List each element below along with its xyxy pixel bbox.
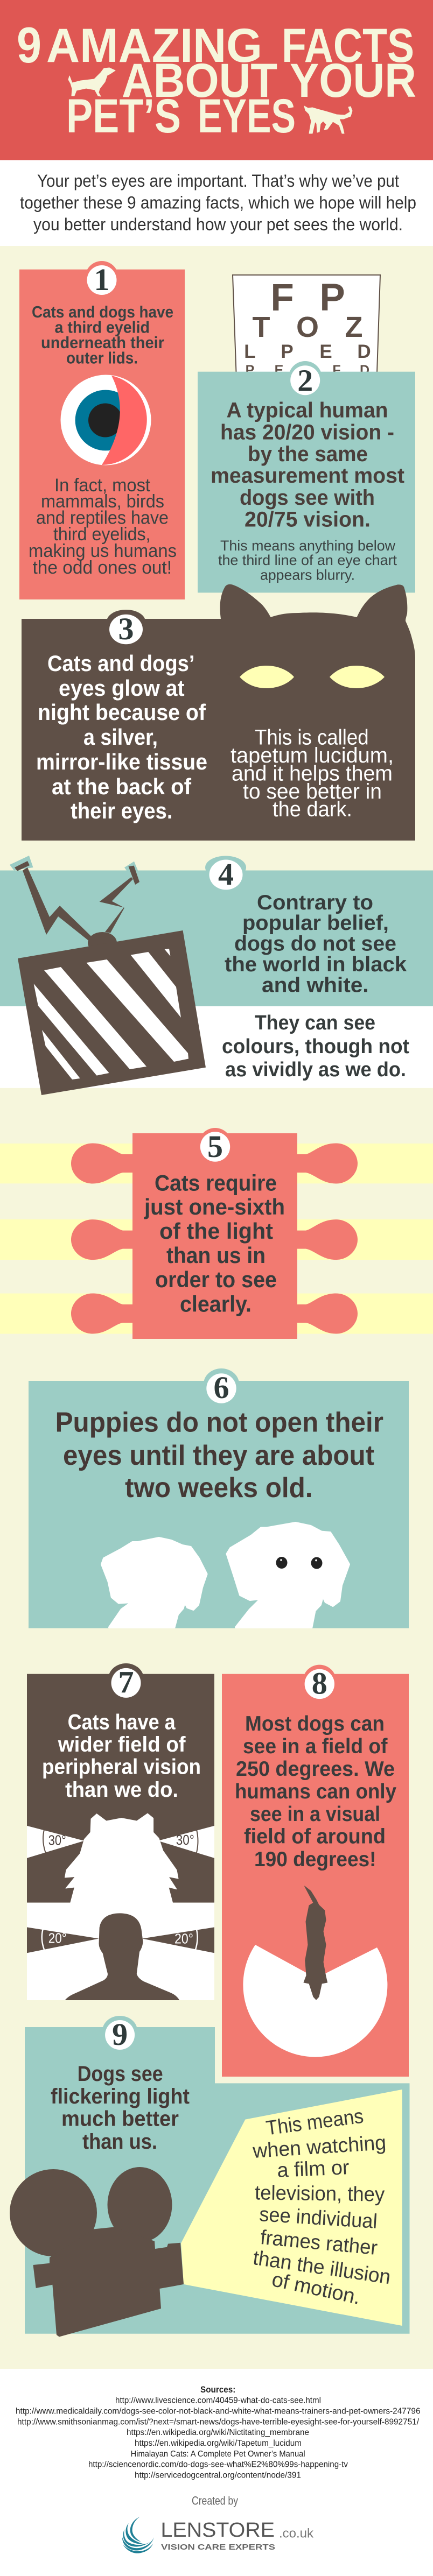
fact 9 body text on beam: than the illusion [252,2247,392,2289]
logo: Lenstore: VISION CARE EXPERTS [161,2543,275,2552]
icon: eye chart: L [244,341,256,362]
fact 9 heading: than us. [82,2130,157,2154]
fact 8 text [235,1712,396,1871]
fact 1 body text: mammals, birds [41,491,164,512]
fact 4 heading: popular belief, [242,912,389,935]
fact 2 heading: has 20/20 vision - [220,420,394,444]
fact 2 body text [218,538,397,583]
human vision diagram: 20° [48,1930,67,1946]
number 5 [200,1129,230,1164]
cat vision diagram: 30° [48,1832,66,1848]
fact 4 body text: They can see [255,1012,375,1034]
fact 3 body text: the dark. [273,797,352,821]
sources list: https://en.wikipedia.org/wiki/Tapetum_lucidum [135,2439,302,2448]
fact 1 body text [29,475,177,578]
panel: fact 6 [29,1368,409,1628]
fact 2 heading: by the same [248,442,368,466]
number 7 [111,1665,141,1700]
fact 9 body text on beam: a film or [277,2156,350,2182]
fact 4 body text: as vividly as we do. [225,1058,406,1081]
fact 8 text: see in a visual [250,1803,380,1826]
fact 9 heading [51,2062,190,2154]
header: title [0,0,433,160]
fact 2 heading: measurement most [211,464,404,488]
fact 3 heading: eyes glow at [59,675,185,701]
intro text: Your pet’s eyes are important. That’s why we’ve put [37,171,399,190]
fact 5 text: of the light [159,1218,273,1244]
fact 8 text: 250 degrees. We [236,1758,395,1781]
number 6: 6 [213,1370,229,1405]
fact 8 text: field of around [244,1825,386,1848]
intro text [20,171,416,234]
panel: fact 9 [10,2016,409,2337]
fact 5 text: order to see [155,1267,277,1292]
fact 6 text: Puppies do not open their [55,1407,383,1438]
fact 9 body text on beam: frames rather [260,2226,379,2260]
number 9: 9 [112,2017,128,2052]
sources list: Sources: [200,2384,235,2395]
fact 3 heading: night because of [38,700,206,725]
fact 3 body text: This is called [255,726,369,750]
fact 1 body text: In fact, most [54,475,151,496]
icon: eye with third eyelid [60,375,151,465]
fact 2 body text: appears blurry. [260,567,355,583]
sources list: http://sciencenordic.com/do-dogs-see-what%E2%80%99s-happening-tv [88,2460,348,2469]
fact 7 text [42,1711,201,1802]
fact 9 body text on beam: of motion. [270,2268,362,2309]
number 3: 3 [118,611,134,646]
number 6 [206,1370,236,1405]
fact 9 body text on beam [252,2105,392,2309]
panel: fact 8 [222,1665,409,2077]
fact 9 heading: Dogs see [78,2062,163,2086]
sources list: http://www.livescience.com/40459-what-do-cats-see.html [115,2396,321,2405]
fact 1 heading: underneath their [41,333,164,352]
fact 5 text: clearly. [180,1291,252,1316]
fact 8 text: humans can only [235,1780,396,1803]
icon: film camera [10,2167,184,2337]
fact 3 body text: to see better in [243,780,382,803]
fact 9 heading: much better [61,2107,179,2131]
fact 3 heading: mirror-like tissue [36,749,207,774]
title text: PET’S [66,89,181,143]
fact 7 text: than we do. [65,1778,178,1802]
fact 3 body text: and it helps them [232,762,393,786]
icon: eye chart: D [357,341,371,362]
icon: eye chart: E [319,341,332,362]
number 2: 2 [297,363,313,398]
fact 5 text: Cats require [155,1170,277,1196]
fact 4 body text [222,1012,409,1081]
panel: fact 4 [0,856,433,1095]
icon: puppy with open eyes [227,1523,349,1627]
title text [17,17,416,143]
number 9 [105,2017,135,2052]
fact 9 body text on beam: see individual [259,2203,378,2233]
fact 4 heading: dogs do not see [234,932,396,955]
number 1: 1 [94,262,110,297]
fact 7 text: peripheral vision [42,1755,201,1779]
fact 6 text: eyes until they are about [63,1440,374,1471]
number 5: 5 [207,1129,223,1164]
icon: eye chart: E [275,363,283,378]
fact 7 text: Cats have a [68,1711,176,1734]
icon: cat [304,106,352,133]
panel: fact 5 [0,1128,433,1339]
fact 3 heading: at the back of [52,774,192,799]
fact 4 heading [225,891,407,997]
icon: eye chart: P [246,363,254,378]
fact 4 body text: colours, though not [222,1035,409,1058]
human vision diagram: 20° [174,1930,193,1946]
fact 9 heading: flickering light [51,2085,190,2108]
fact 5 text: just one-sixth [144,1194,285,1219]
fact 5 text: than us in [166,1243,266,1268]
fact 2 heading [211,399,404,532]
sources list: http://servicedogcentral.org/content/node/391 [135,2471,301,2480]
fact 2 heading: 20/75 vision. [245,508,371,532]
icon: eye chart: P [319,277,345,319]
fact 6 text: two weeks old. [125,1472,312,1504]
fact 1 body text: and reptiles have [36,508,169,528]
fact 1 heading: Cats and dogs have [32,302,173,321]
title text: ABOUT [122,53,277,107]
number 8 [305,1666,334,1700]
icon: eye chart: F [332,363,341,378]
fact 4 heading: the world in black [225,953,407,976]
sources list: http://www.medicaldaily.com/dogs-see-color-not-black-and-white-what-means-trainers-and-pet-owners-247796 [16,2406,421,2416]
dog field of vision diagram [243,1886,387,2057]
title text: YOUR [290,53,416,107]
fact 2 heading: dogs see with [240,486,375,510]
fact 1 heading: outer lids. [66,349,138,368]
fact 3 heading: a silver, [83,724,158,750]
fact 2 body text: the third line of an eye chart [218,552,397,568]
title text: AMAZING [46,18,262,72]
fact 6 text [55,1407,383,1504]
logo: Lenstore: .co.uk [279,2526,314,2541]
sources list: http://www.smithsonianmag.com/ist/?next=/smart-news/dogs-have-terrible-eyesight-see-for-yourself-8992751/ [17,2417,420,2427]
icon: eye chart: O [296,311,319,343]
number 1 [87,262,116,297]
fact 2 body text: This means anything below [220,538,395,554]
number 8: 8 [312,1666,327,1700]
intro text: you better understand how your pet sees the world. [33,215,403,234]
sources list: https://en.wikipedia.org/wiki/Nictitating_membrane [127,2428,309,2437]
fact 2 heading: A typical human [226,399,388,422]
fact 1 body text: third eyelids, [53,524,151,545]
icon: eye chart: F [270,277,294,319]
fact 8 text: see in a field of [243,1735,388,1758]
fact 8 text: 190 degrees! [254,1848,376,1871]
panel: fact 3 [22,584,415,841]
icon: eye chart: Z [345,311,363,343]
number 4: 4 [218,857,234,892]
fact 4 heading: Contrary to [257,891,373,914]
light bulbs [71,1143,358,1333]
created by: Created by [192,2494,238,2508]
icon: television with antennae [10,856,206,1095]
sources list: Himalayan Cats: A Complete Pet Owner’s Manual [131,2450,305,2459]
intro text: together these 9 amazing facts, which we hope will help [20,193,416,212]
icon: glowing cat eyes [240,666,385,688]
sources list [16,2384,421,2480]
fact 3 heading: Cats and dogs’ [47,651,195,676]
number 7: 7 [118,1665,134,1700]
number 3 [109,611,143,646]
logo swirl [122,2517,154,2553]
logo: Lenstore: LENSTORE [160,2519,275,2542]
cat vision diagram: 30° [176,1832,194,1848]
panel: fact 2 [198,361,415,592]
icon: puppy with closed eyes [102,1538,207,1627]
fact 9 body text on beam: This means [265,2105,365,2140]
logo: Lenstore [122,2517,314,2553]
title text: 9 [17,17,41,73]
panel: fact 1 [19,261,185,599]
number 4 [209,857,242,892]
fact 1 heading: a third eyelid [55,318,150,337]
human vision diagram [27,1913,214,2000]
fact 9 body text on beam: when watching [252,2132,387,2163]
title text: EYES [198,89,296,143]
cat vision diagram [27,1813,214,1903]
light stripes [0,1144,433,1334]
fact 7 text: wider field of [58,1733,186,1756]
icon: dachshund [68,68,115,96]
number 2 [290,363,320,398]
fact 9 body text on beam: television, they [255,2182,385,2206]
fact 3 body text: tapetum lucidum, [231,744,394,767]
fact 1 body text: the odd ones out! [32,557,172,578]
fact 1 body text: making us humans [29,541,177,561]
fact 5 text [144,1170,285,1316]
fact 1 heading [32,302,173,368]
icon: eye chart: T [252,311,270,343]
cat head silhouette panel [22,584,415,841]
fact 8 text: Most dogs can [245,1712,385,1735]
fact 3 heading: their eyes. [71,798,172,823]
fact 3 heading [36,651,207,823]
icon: eye chart [233,275,380,378]
panel: fact 7 [27,1663,214,2000]
projector light beam [181,2090,402,2326]
fact 3 body text [231,726,394,821]
icon: eye chart: D [360,363,369,378]
fact 4 heading: and white. [262,974,369,997]
icon: eye chart: P [281,341,294,362]
